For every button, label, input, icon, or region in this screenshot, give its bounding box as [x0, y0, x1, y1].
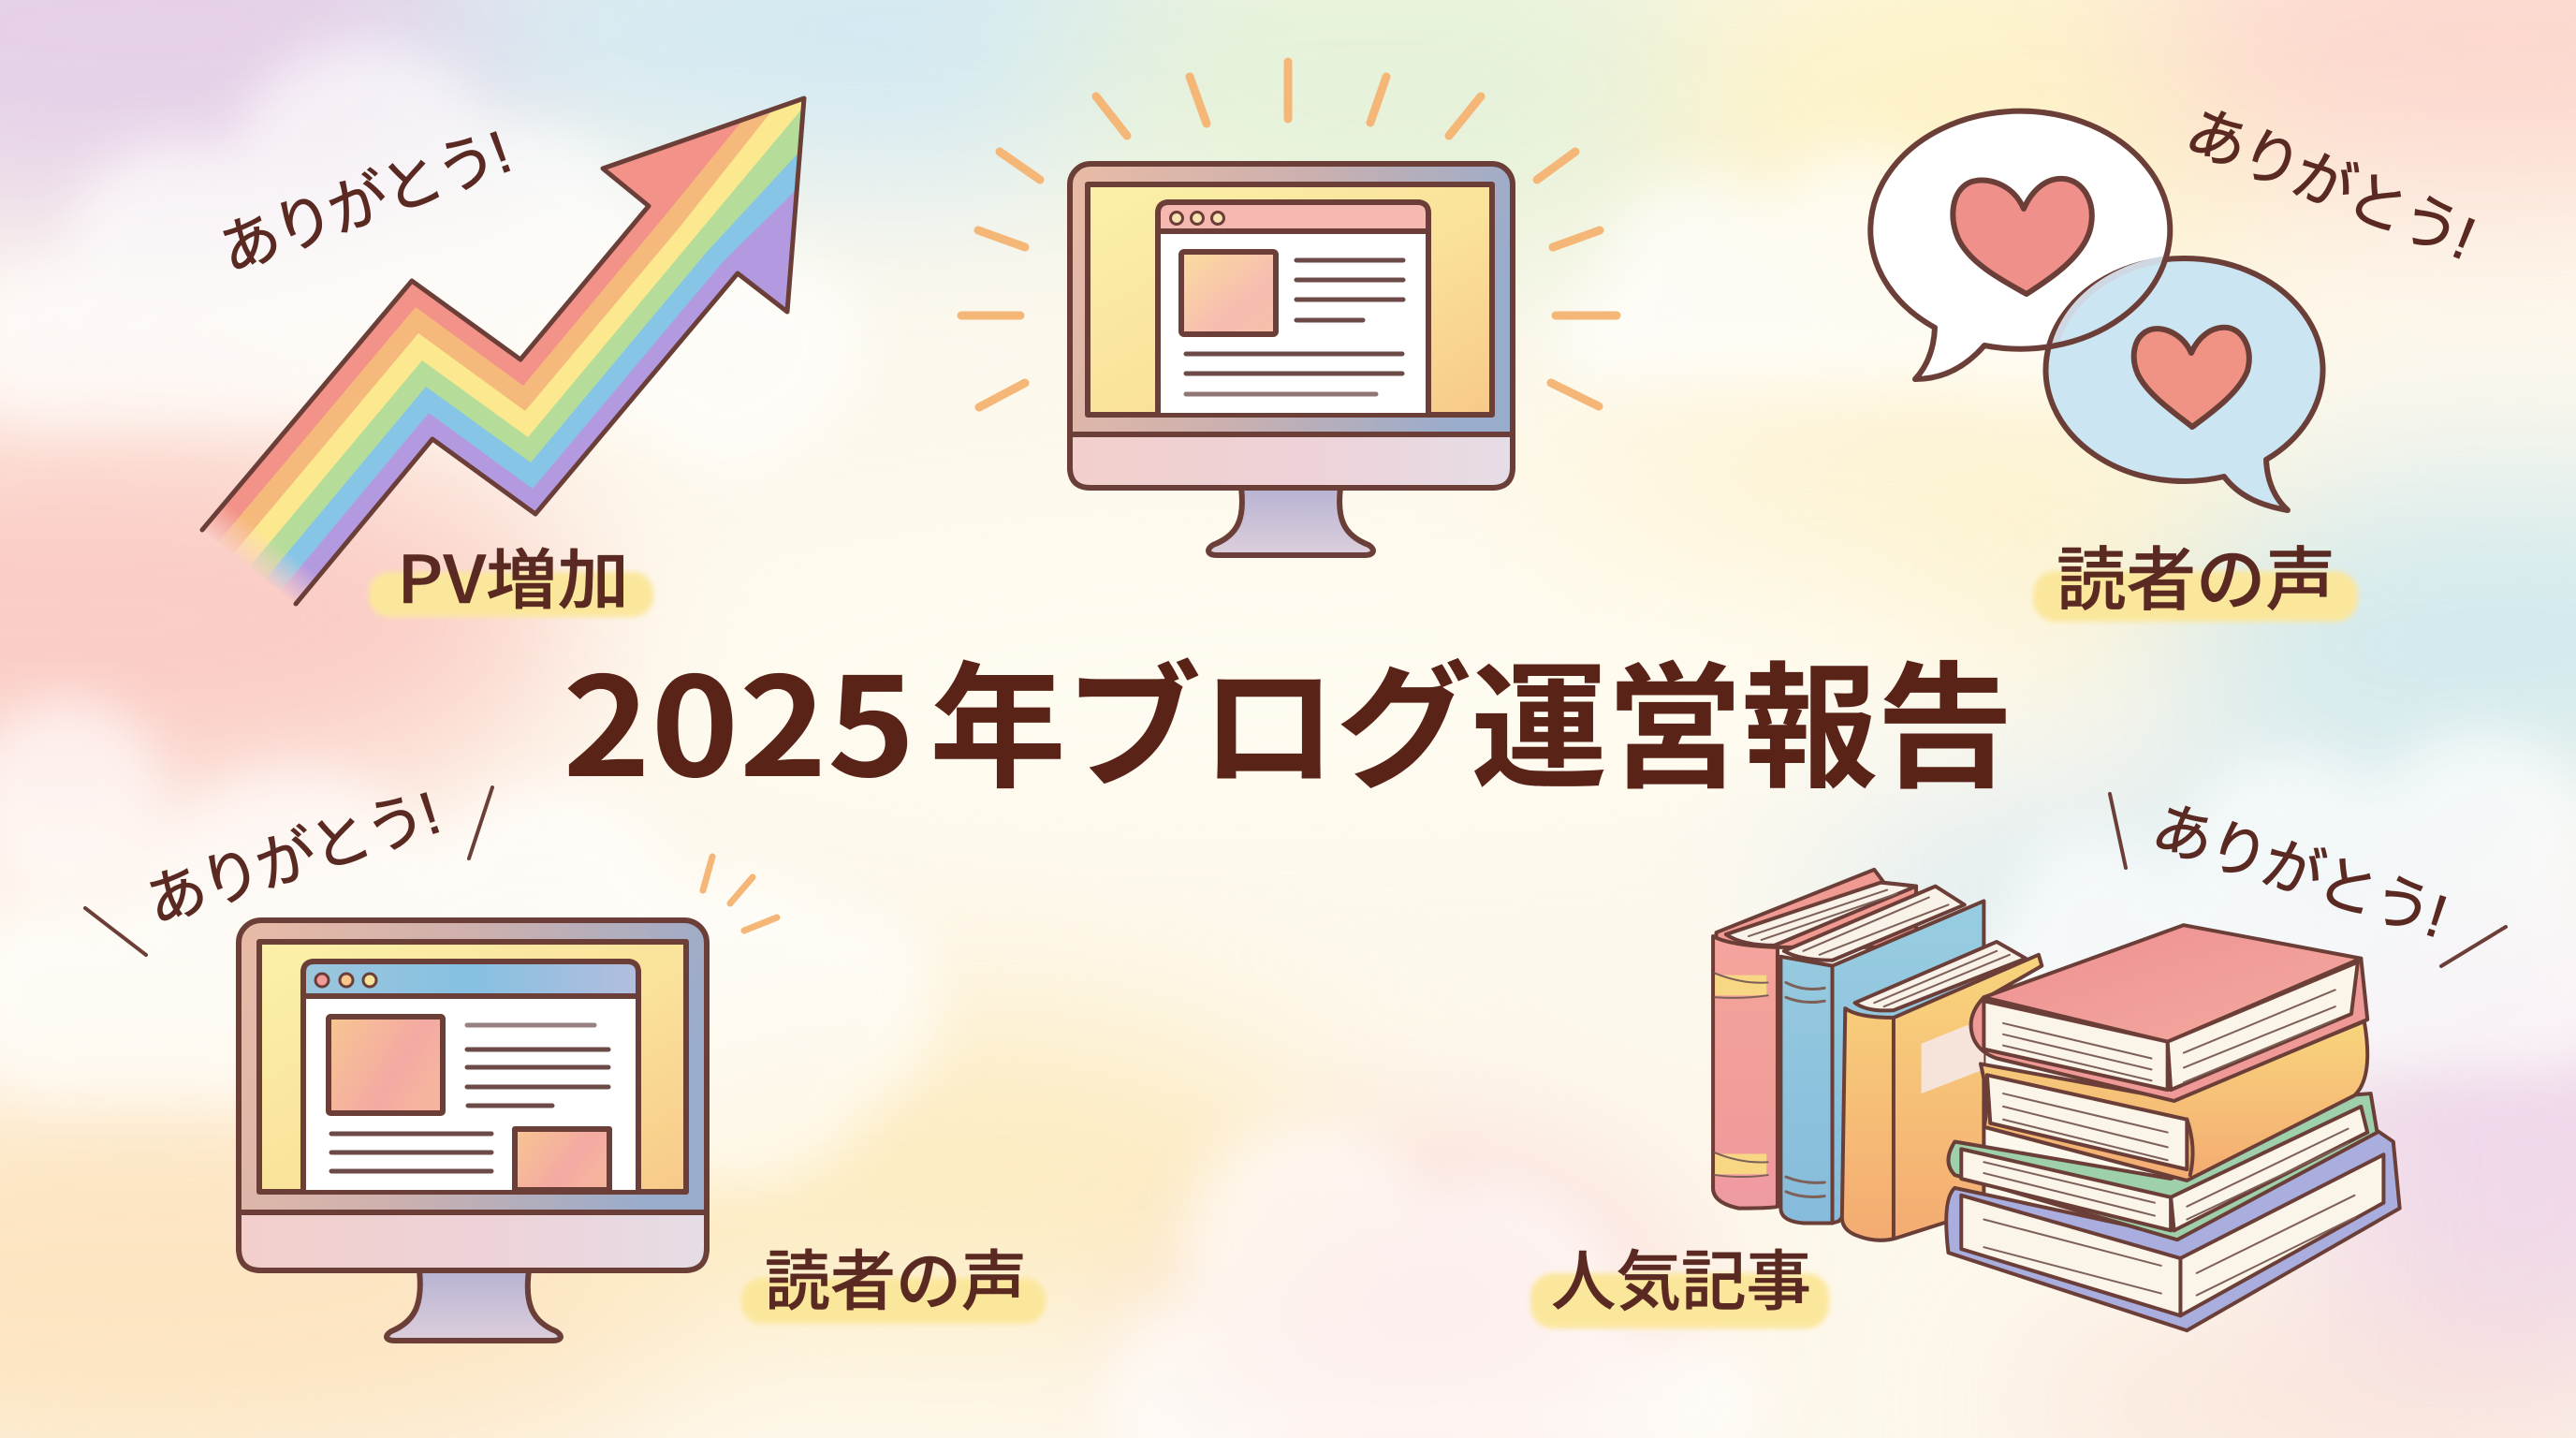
- book: red upright: [1713, 870, 1916, 1209]
- book: orange upright: [1842, 942, 2042, 1240]
- book: purple bottom of stack: [1946, 1131, 2400, 1330]
- monitor stand: [387, 1270, 561, 1341]
- browser window: [1158, 202, 1428, 413]
- monitor screen: [1088, 184, 1492, 415]
- label: PV increase: PV増加: [397, 528, 629, 623]
- monitor screen: [259, 942, 686, 1192]
- handwritten text: thanks near books with ticks: ありがとう!: [2144, 793, 2455, 950]
- book: green in stack: [1948, 1093, 2378, 1240]
- monitor body: [1070, 164, 1513, 488]
- title: 年ブログ運営報告: [929, 653, 2013, 805]
- icon: sun rays around monitor: [961, 62, 1617, 407]
- handwritten text: thanks bottom left with ticks: [85, 779, 492, 955]
- monitor chin: [1070, 434, 1513, 488]
- browser window: [303, 961, 638, 1190]
- label: popular articles: 人気記事: [1551, 1245, 1811, 1318]
- title: 2025: [563, 619, 915, 816]
- handwritten text: thanks bottom left with ticks: ありがとう!: [138, 779, 448, 936]
- icon: rainbow growth arrow: [200, 95, 807, 607]
- label: reader voices top: 読者の声: [2056, 541, 2335, 619]
- title: [563, 619, 2013, 816]
- handwritten text: thanks near arrow: ありがとう!: [211, 118, 520, 285]
- handwritten text: thanks near bubbles: ありがとう!: [2177, 96, 2484, 272]
- speech bubble: white: [1870, 111, 2170, 379]
- monitor chin: [239, 1212, 707, 1270]
- monitor body: [239, 920, 707, 1270]
- icon: bottom desktop monitor: [239, 920, 707, 1341]
- icon: heart large: [1953, 179, 2092, 294]
- icon: heart small: [2134, 328, 2249, 427]
- label: reader voices bottom: 読者の声: [765, 1245, 1027, 1318]
- monitor stand: [1208, 488, 1373, 555]
- icon: small orange rays: [703, 857, 777, 931]
- icon: top desktop monitor: [1070, 164, 1513, 555]
- book: orange in stack: [1981, 1021, 2367, 1181]
- speech bubble: blue: [2046, 258, 2323, 510]
- book: blue upright: [1780, 887, 1983, 1223]
- icon: speech bubbles with hearts: [1870, 111, 2329, 510]
- icon: pile of books: [1713, 870, 2400, 1330]
- book: red top of stack: [1971, 925, 2367, 1101]
